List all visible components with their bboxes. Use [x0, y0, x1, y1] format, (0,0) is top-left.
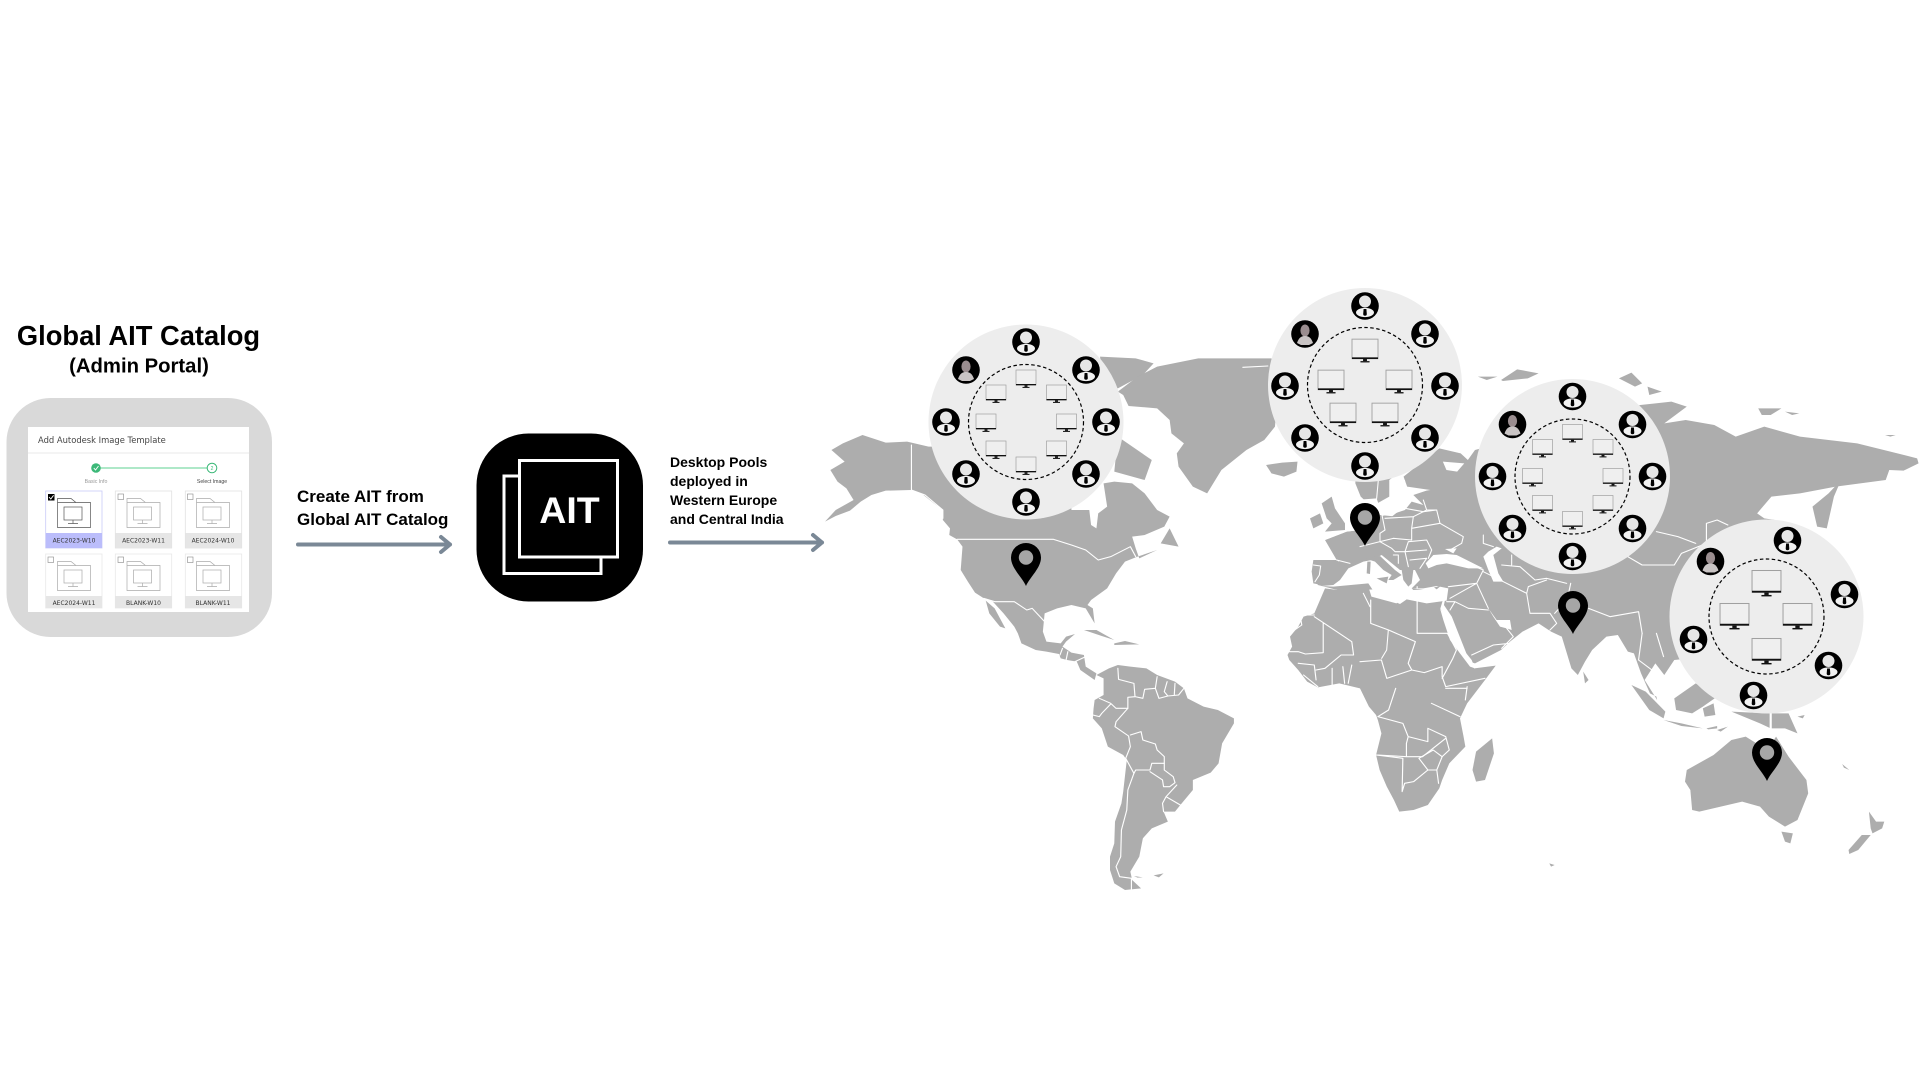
- tile: BLANK-W10: [115, 554, 172, 608]
- subtitle: (Admin Portal): [69, 356, 209, 378]
- label: create AIT: Create AIT from: [297, 487, 424, 506]
- stepper: 2: [211, 466, 214, 472]
- world map: [825, 357, 1919, 890]
- pin: Western Europe: [1350, 503, 1380, 546]
- stepper: Select Image: [197, 479, 227, 485]
- label: desktop pools: Desktop Pools: [670, 454, 767, 470]
- tile: AEC2023-W10: AEC2023-W10: [53, 538, 96, 544]
- stepper: [85, 463, 227, 485]
- title: Global AIT Catalog: [17, 320, 260, 351]
- pin: North America: [1011, 543, 1041, 586]
- tile: AEC2024-W10: [185, 491, 242, 548]
- cluster: Western Europe pool: [1268, 288, 1462, 482]
- users: [1271, 292, 1459, 480]
- tile: BLANK-W10: BLANK-W10: [126, 600, 161, 607]
- Europe and Middle East detail: [1280, 480, 1567, 668]
- users: [1479, 383, 1666, 570]
- monitors: [1318, 339, 1412, 426]
- portal heading: Add Autodesk Image Template: [38, 435, 166, 445]
- icon: AIT: [476, 434, 643, 602]
- tile: AEC2024-W11: AEC2024-W11: [53, 600, 96, 607]
- label: desktop pools: deployed in: [670, 473, 748, 489]
- tile: AEC2023-W10: [46, 491, 102, 548]
- tile: AEC2024-W11: [46, 554, 102, 608]
- users: [932, 328, 1120, 516]
- tile: AEC2023-W11: [115, 491, 172, 548]
- pin: Australia: [1752, 738, 1782, 781]
- monitors: [1522, 424, 1623, 529]
- tile: BLANK-W11: BLANK-W11: [196, 600, 231, 607]
- monitors: [1720, 570, 1812, 664]
- label: create AIT: Global AIT Catalog: [297, 510, 448, 529]
- tile: AEC2024-W10: AEC2024-W10: [192, 538, 235, 544]
- stepper: Basic Info: [85, 479, 108, 485]
- cluster: Asia Pacific pool: [1670, 520, 1864, 714]
- pin: Central India: [1558, 591, 1588, 634]
- label: desktop pools: and Central India: [670, 511, 784, 527]
- arrow: catalog to AIT: [298, 537, 450, 552]
- users: [1680, 527, 1858, 709]
- monitors: [976, 370, 1076, 475]
- tile: AEC2023-W11: AEC2023-W11: [122, 538, 165, 544]
- cluster: Central India pool: [1475, 379, 1670, 574]
- label: desktop pools: Western Europe: [670, 492, 777, 508]
- panel: admin portal screenshot: [6, 398, 272, 637]
- cluster: North America pool: [928, 324, 1124, 520]
- arrow: AIT to map: [670, 535, 822, 550]
- icon: AIT: AIT: [539, 489, 600, 531]
- tile: BLANK-W11: [185, 554, 242, 608]
